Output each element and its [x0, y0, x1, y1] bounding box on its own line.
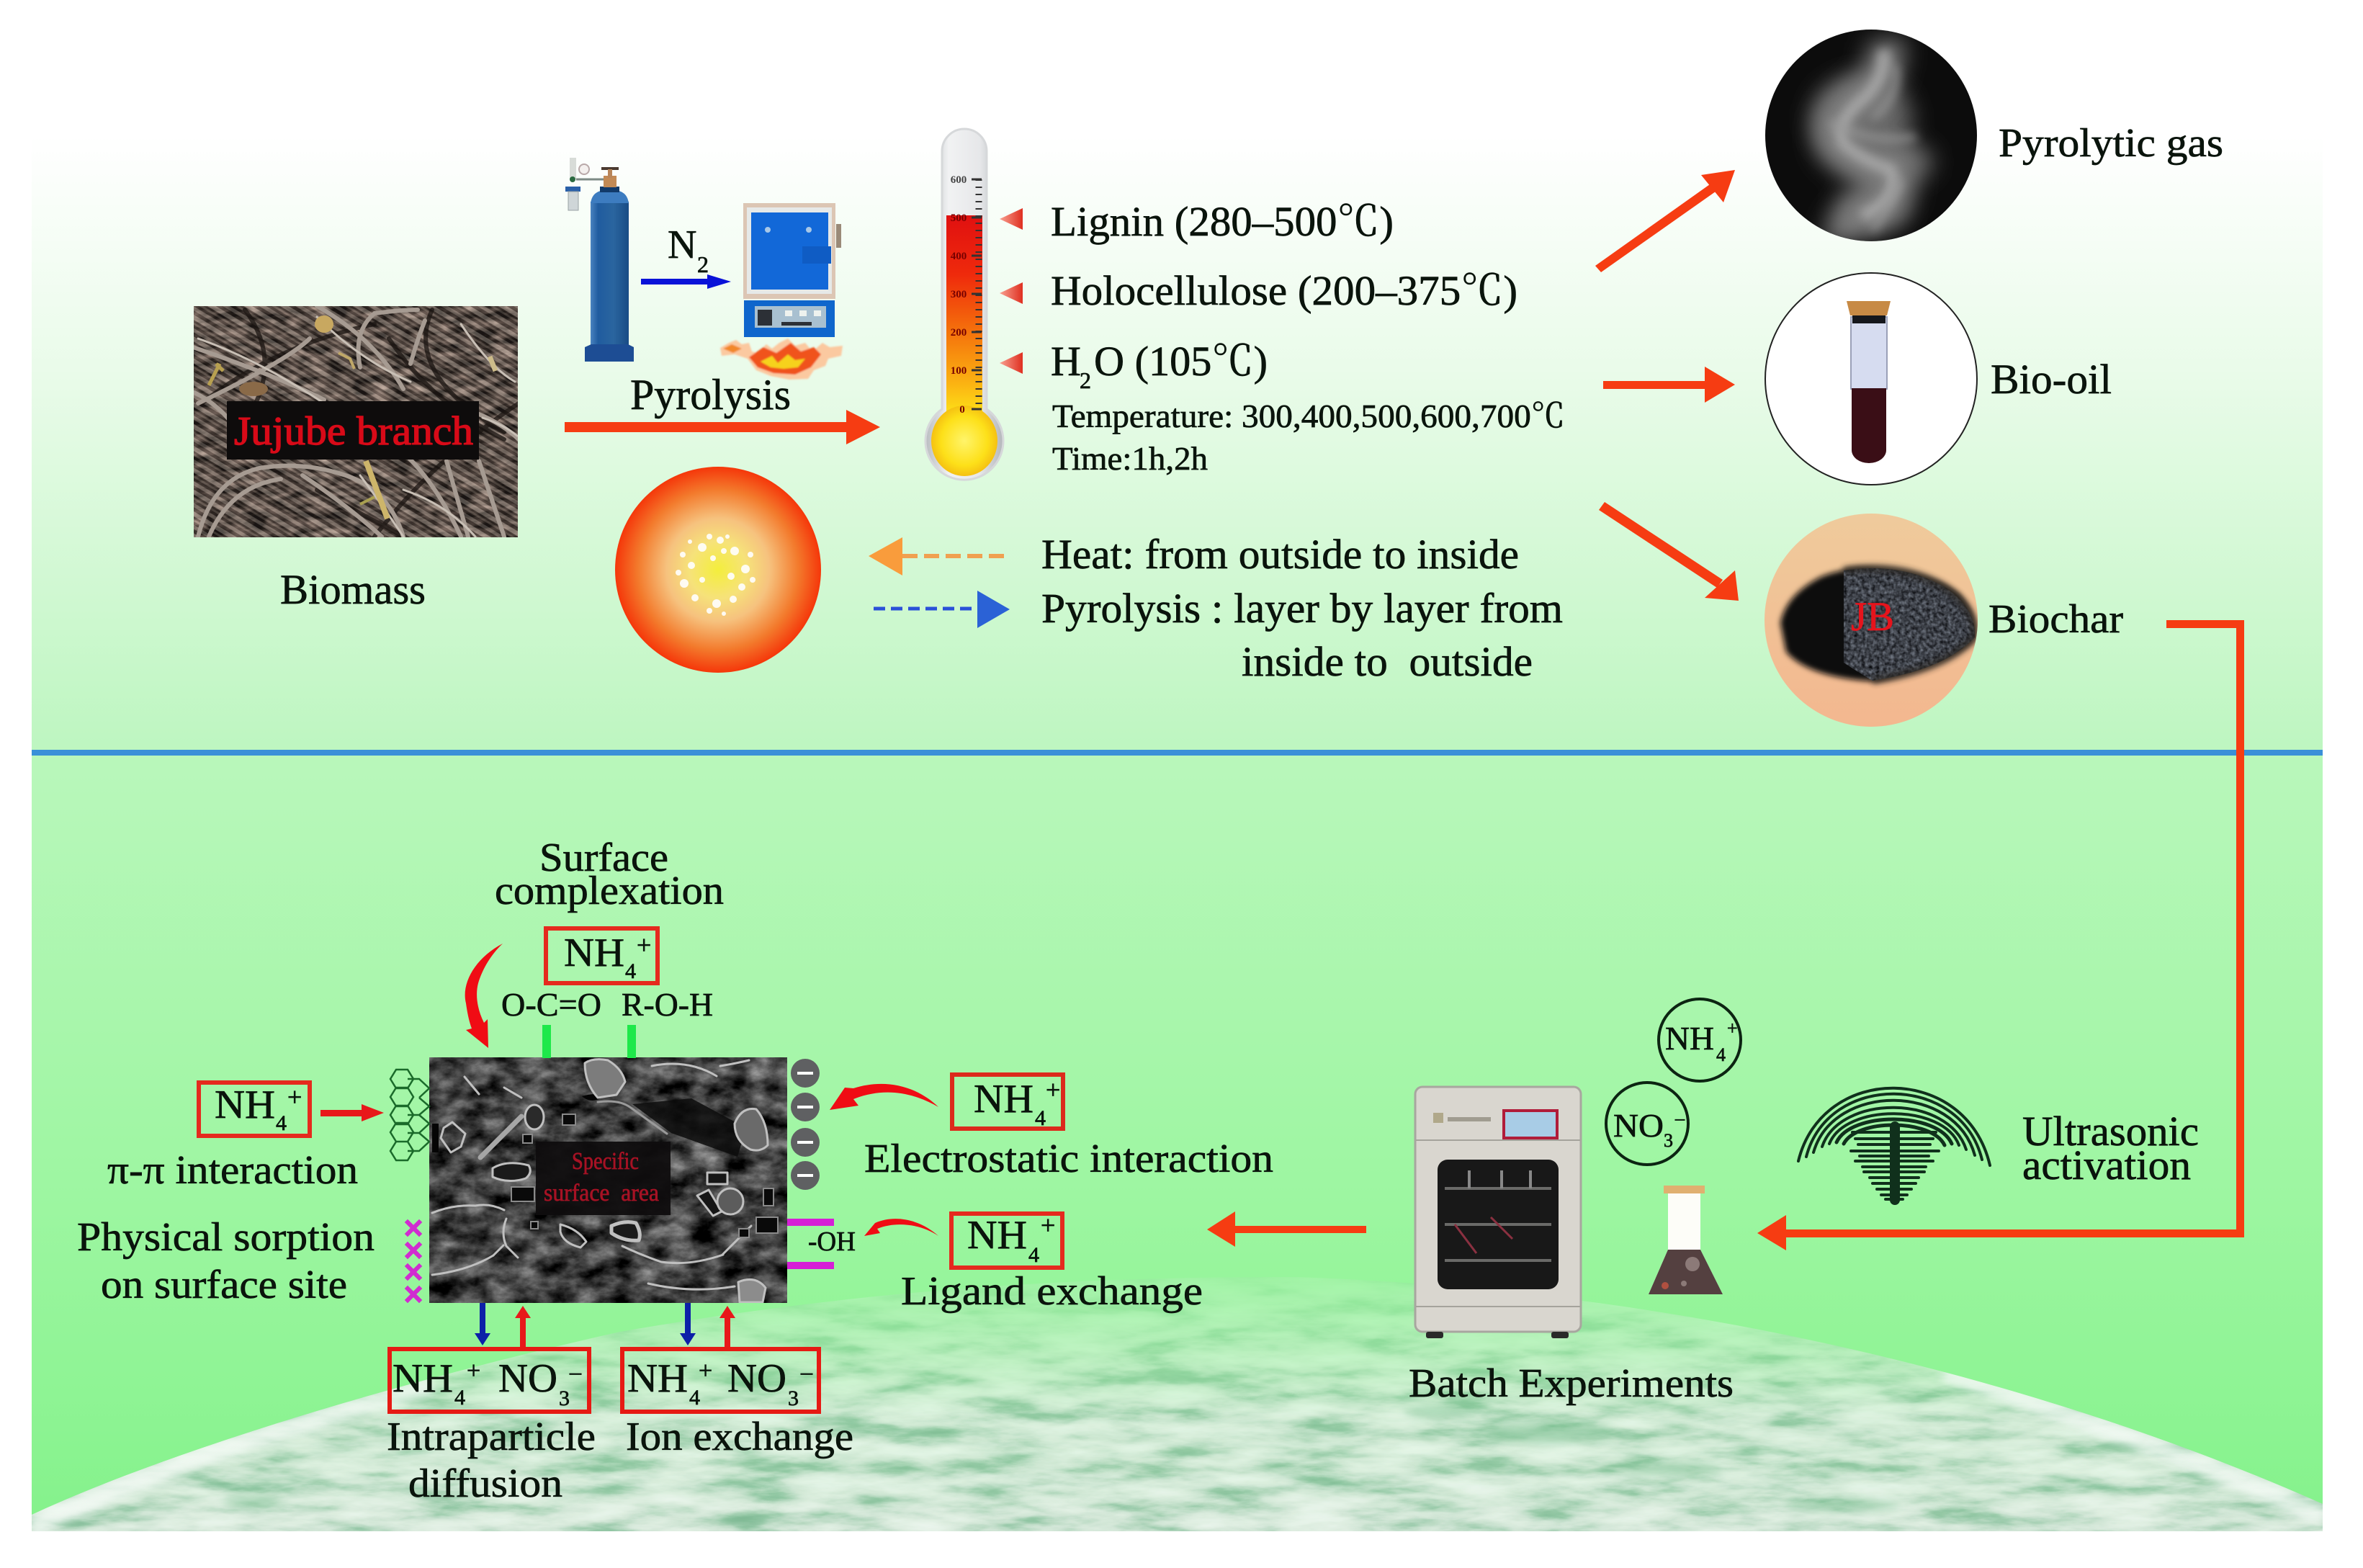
text: OH group: -OH	[808, 1227, 856, 1257]
text: physical sorption	[77, 1215, 375, 1307]
box: NH4+ surface complexation: NH	[564, 931, 624, 975]
box: NH4+ ligand exchange	[951, 1211, 1062, 1268]
image: biochar powder	[1757, 513, 1981, 727]
box: NH4+ pi-pi interaction: +	[287, 1083, 302, 1111]
image: biochar powder: JB	[1851, 594, 1894, 640]
image: SEM of biochar surface	[429, 1057, 787, 1303]
text: surface complexation: Surface	[539, 835, 668, 880]
text: physical sorption: on surface site	[101, 1263, 347, 1307]
box: NH4+ pi-pi interaction	[199, 1083, 310, 1136]
label: specific surface area: Specific	[572, 1148, 639, 1175]
label: specific surface area	[536, 1142, 671, 1215]
text: physical sorption: Physical sorption	[77, 1215, 375, 1260]
text: pi-pi interaction: π-π interaction	[107, 1148, 358, 1193]
icon: ultrasonic waves	[1798, 1088, 1990, 1201]
ion: NO3- circle: 3	[1664, 1130, 1673, 1151]
box: NH4+ ligand exchange: 4	[1028, 1243, 1039, 1267]
text: bio-oil: Bio-oil	[1991, 356, 2112, 403]
arrow: heat direction	[869, 537, 1005, 575]
box: NH4+ surface complexation: +	[637, 931, 651, 959]
ion: NO3- circle: –	[1674, 1108, 1685, 1129]
box: NH4+ electrostatic: 4	[1035, 1106, 1046, 1130]
arrow: to pyrolytic gas	[1595, 170, 1735, 272]
icon: thermometer	[925, 129, 1003, 480]
markers: decomposition temperatures	[1000, 208, 1023, 374]
icon: thermometer: 500	[951, 212, 967, 224]
box: NH4+ electrostatic: +	[1046, 1075, 1060, 1104]
icon: flames	[720, 339, 843, 380]
text: pyrolytic gas: Pyrolytic gas	[1999, 121, 2223, 166]
text: ultrasonic activation: Ultrasonic	[2022, 1108, 2199, 1155]
text: surface complexation: complexation	[495, 869, 724, 913]
ion: NH4+ circle	[1659, 999, 1741, 1081]
label: jujube branch: Jujube branch	[234, 409, 473, 454]
image: bio-oil test tube	[1765, 273, 1977, 485]
box: NH4+ NO3- intraparticle diffusion: NH	[393, 1356, 453, 1401]
arrow: batch experiments to mechanism	[1207, 1211, 1366, 1247]
arrow: to bio-oil	[1603, 367, 1735, 403]
box: NH4+ pi-pi interaction: NH	[215, 1083, 275, 1127]
box: NH4+ ligand exchange: NH	[967, 1213, 1027, 1258]
box: NH4+ NO3- ion exchange: NH	[627, 1356, 688, 1401]
text: pyrolysis: Pyrolysis	[630, 371, 791, 418]
icon: heated biomass particle	[615, 467, 821, 673]
text: intraparticle diffusion	[387, 1415, 596, 1506]
text: functional groups: R-O-H	[622, 986, 713, 1023]
arrow: pi-pi	[320, 1104, 384, 1121]
ion: NH4+ circle: 4	[1716, 1044, 1726, 1065]
planet surface backdrop	[32, 1268, 2323, 1531]
text: time conditions: Time:1h,2h	[1052, 440, 1208, 477]
arrow: to biochar	[1599, 502, 1739, 601]
icon: nitrogen gas cylinder	[565, 158, 634, 362]
icon: graphene hexagons	[390, 1070, 429, 1160]
box: NH4+ NO3- ion exchange: NO	[727, 1356, 786, 1401]
ion: NO3- circle	[1606, 1083, 1688, 1165]
text: batch experiments: Batch Experiments	[1409, 1361, 1734, 1406]
icon: thermometer: 300	[951, 289, 967, 300]
text: functional groups: O-C=O	[501, 986, 601, 1023]
icon: thermometer: 100	[951, 365, 967, 377]
text: functional groups	[501, 986, 713, 1023]
box: NH4+ ligand exchange: +	[1041, 1211, 1055, 1240]
text: surface complexation	[495, 835, 724, 913]
arrow: surface complexation	[465, 944, 503, 1048]
text: biochar: Biochar	[1988, 597, 2123, 642]
text: temperature conditions: Temperature: 300,400,500,600,700℃	[1052, 398, 1565, 434]
section divider line	[32, 750, 2323, 756]
box: NH4+ electrostatic: NH	[974, 1077, 1033, 1121]
box: NH4+ NO3- intraparticle diffusion: –	[569, 1358, 582, 1384]
icon: thermometer: 0	[959, 404, 965, 416]
text: ion exchange: Ion exchange	[626, 1415, 853, 1459]
text: inside to outside: inside to outside	[1242, 638, 1533, 685]
text: lignin: Lignin (280–500℃)	[1051, 198, 1394, 245]
arrow: biomass to thermometer	[565, 410, 880, 444]
background panel: adsorption section	[32, 753, 2323, 1531]
text: N2: 2	[697, 251, 709, 277]
box: NH4+ electrostatic	[952, 1075, 1063, 1130]
box: NH4+ NO3- intraparticle diffusion: 3	[559, 1386, 570, 1410]
box: NH4+ NO3- intraparticle diffusion: +	[467, 1358, 480, 1384]
box: NH4+ NO3- ion exchange	[622, 1349, 819, 1412]
text: water: 2	[1080, 367, 1091, 393]
background panel: pyrolysis section	[32, 0, 2323, 753]
icon: thermometer: 400	[951, 251, 967, 262]
ligand bonds	[787, 1219, 834, 1269]
text: intraparticle diffusion: Intraparticle	[387, 1415, 596, 1459]
text: ultrasonic activation	[2022, 1108, 2199, 1188]
box: NH4+ pi-pi interaction: 4	[276, 1111, 287, 1135]
text: ligand exchange: Ligand exchange	[901, 1269, 1203, 1314]
ion: NH4+ circle: NH	[1665, 1020, 1714, 1057]
box: NH4+ NO3- intraparticle diffusion: 4	[454, 1386, 465, 1410]
text: holocellulose: Holocellulose (200–375℃)	[1051, 267, 1517, 314]
box: NH4+ NO3- ion exchange: +	[699, 1358, 712, 1384]
arrow: nitrogen flow	[641, 274, 731, 289]
text: water: O (105℃)	[1094, 338, 1268, 385]
icon: negative charges	[791, 1059, 820, 1190]
icon: batch incubator	[1415, 1087, 1581, 1338]
arrow: biochar to batch experiments	[1757, 620, 2244, 1250]
box: NH4+ surface complexation	[546, 928, 658, 983]
icon: purple surface sites	[408, 1222, 419, 1300]
text: biomass: Biomass	[280, 566, 426, 613]
functional group bonds	[542, 1025, 636, 1058]
label: specific surface area: surface area	[544, 1180, 659, 1206]
icon: thermometer: 600	[951, 174, 967, 186]
box: NH4+ surface complexation: 4	[625, 959, 636, 983]
text: intraparticle diffusion: diffusion	[408, 1461, 562, 1506]
icon: flask	[1649, 1186, 1723, 1294]
box: NH4+ NO3- ion exchange: 4	[689, 1386, 700, 1410]
text: N2: N	[668, 223, 696, 267]
arrows: ion transfer	[475, 1303, 735, 1347]
text: electrostatic interaction: Electrostatic interaction	[864, 1137, 1273, 1181]
text: pyrolysis layers: Pyrolysis : layer by layer from	[1041, 585, 1563, 632]
icon: muffle furnace	[743, 203, 841, 337]
ion: NH4+ circle: +	[1727, 1018, 1738, 1039]
photo: jujube branch biomass	[189, 306, 519, 537]
ion: NO3- circle: NO	[1613, 1107, 1664, 1144]
icon: thermometer: 200	[951, 327, 967, 339]
text: heat: Heat: from outside to inside	[1041, 531, 1519, 578]
label: jujube branch	[227, 401, 479, 460]
box: NH4+ NO3- ion exchange: –	[800, 1358, 813, 1384]
arrow: ligand exchange	[864, 1219, 938, 1236]
arrow: electrostatic	[830, 1084, 938, 1110]
text: N2	[668, 223, 709, 277]
box: NH4+ NO3- ion exchange: 3	[788, 1386, 799, 1410]
box: NH4+ NO3- intraparticle diffusion	[390, 1349, 589, 1412]
image: pyrolytic gas	[1765, 29, 1977, 242]
arrow: pyrolysis direction	[874, 591, 1010, 628]
text: ultrasonic activation: activation	[2022, 1142, 2191, 1188]
box: NH4+ NO3- intraparticle diffusion: NO	[498, 1356, 557, 1401]
text: water	[1051, 338, 1268, 393]
text: water: H	[1051, 338, 1081, 385]
